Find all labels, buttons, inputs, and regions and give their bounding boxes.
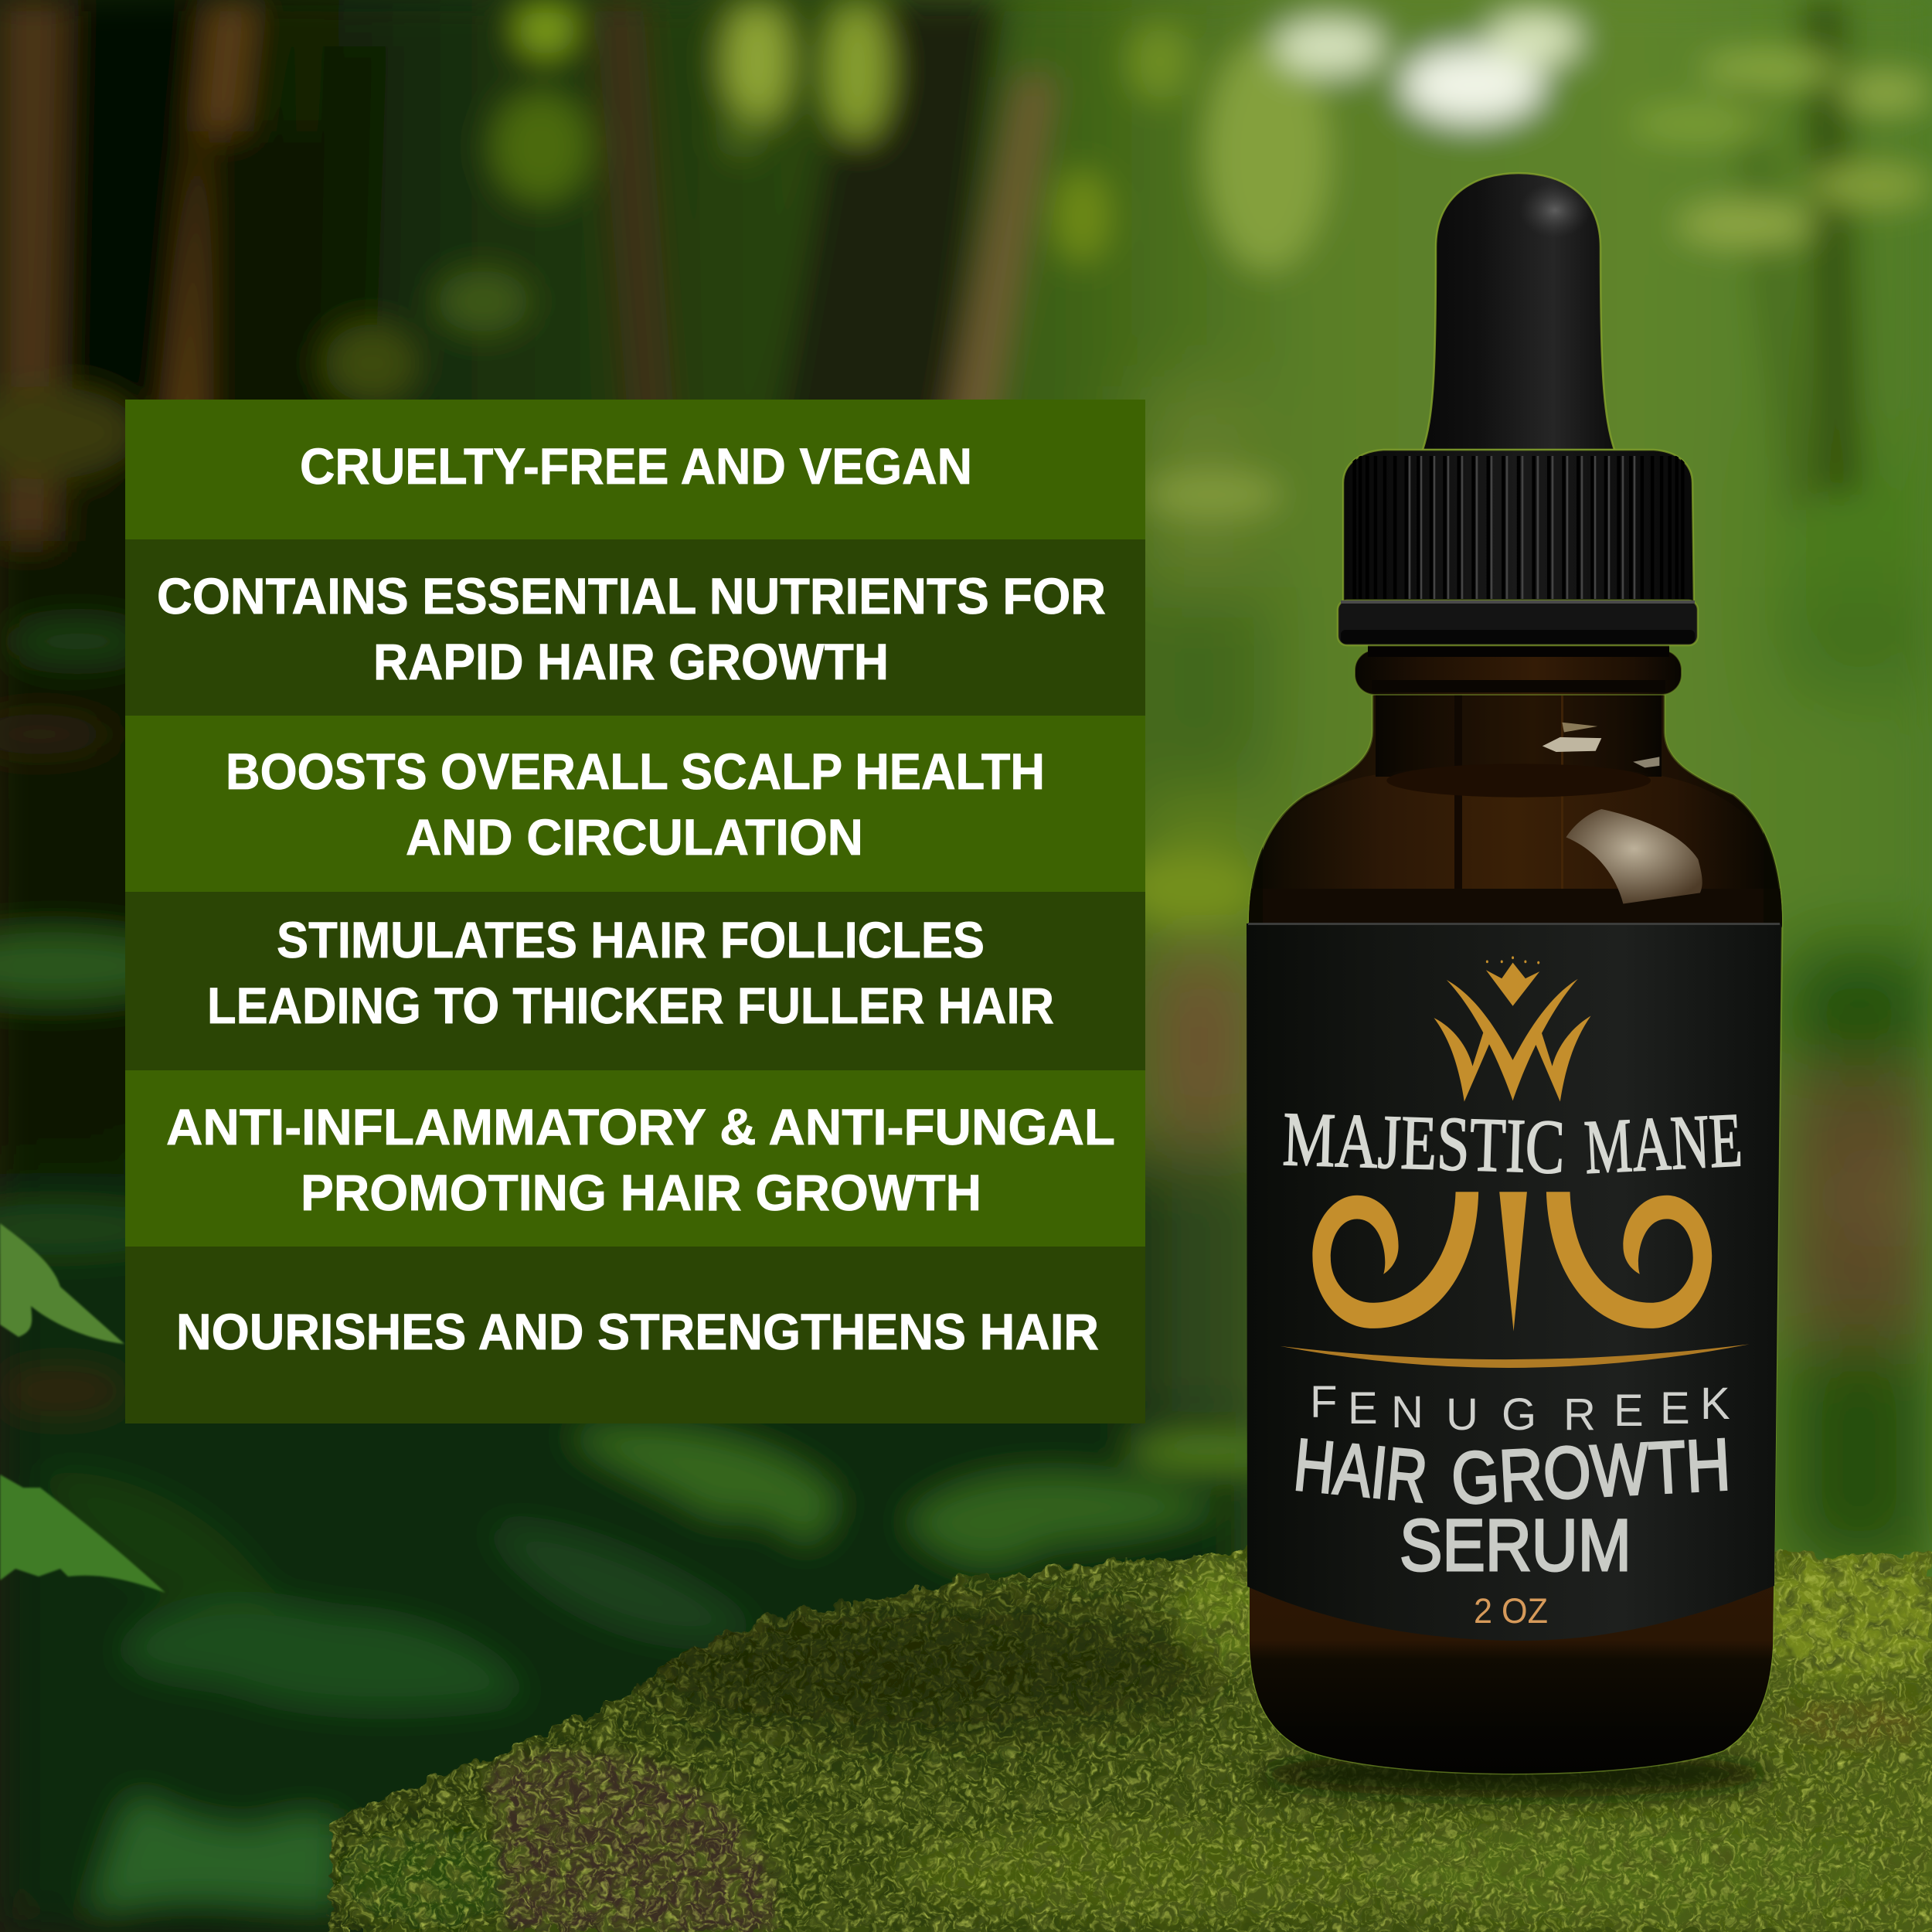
row: anti-inflammatory: ANTI-INFLAMMATORY & ANTI-FUNGAL [166,1098,1115,1155]
row: essential nutrients [125,539,1145,716]
icon: ribbed cap [1338,450,1698,645]
fenugreek: FENUGREEK [1310,1377,1730,1440]
row: scalp health [125,716,1145,892]
blurred ferns and leaves [39,1427,1223,1913]
product name: SERUM [1400,1505,1631,1587]
moss covered rock [309,1546,1932,1932]
row: essential nutrients: RAPID HAIR GROWTH [373,633,889,690]
product label [1247,923,1781,1641]
benefits panel [125,400,1145,1423]
row: scalp health: AND CIRCULATION [406,808,863,866]
logo: gold swirls [1281,1192,1750,1368]
row: hair follicles: LEADING TO THICKER FULLER HAIR [207,977,1054,1034]
logo: crown and W mark [1434,956,1591,1102]
row: hair follicles [125,892,1145,1070]
row: nourishes and strengthens [125,1247,1145,1423]
icon: dropper bulb [1423,173,1614,450]
blurred tree trunks [0,0,1862,541]
icon: amber glass body [1244,649,1785,1785]
row: scalp health: BOOSTS OVERALL SCALP HEALTH [226,743,1045,800]
row: anti-inflammatory [125,1070,1145,1247]
brand name: MAJESTIC [1281,1096,1566,1190]
dappled light [0,11,1932,1470]
volume: 2 OZ [1474,1591,1548,1631]
row: anti-inflammatory: PROMOTING HAIR GROWTH [301,1164,981,1221]
row: cruelty-free and vegan: CRUELTY-FREE AND VEGAN [300,437,972,495]
icon: neck ring [1355,643,1682,695]
product name [1291,1423,1733,1587]
brand name: MANE [1583,1097,1744,1190]
row: nourishes and strengthens: NOURISHES AND STRENGTHENS HAIR [176,1303,1099,1360]
row: essential nutrients: CONTAINS ESSENTIAL NUTRIENTS FOR [157,567,1106,624]
serum bottle [1244,173,1785,1798]
row: cruelty-free and vegan [125,400,1145,539]
row: hair follicles: STIMULATES HAIR FOLLICLES [277,911,985,968]
product name: GROWTH [1450,1423,1733,1520]
product name: HAIR [1291,1423,1430,1519]
foreground leaves [0,1223,165,1593]
